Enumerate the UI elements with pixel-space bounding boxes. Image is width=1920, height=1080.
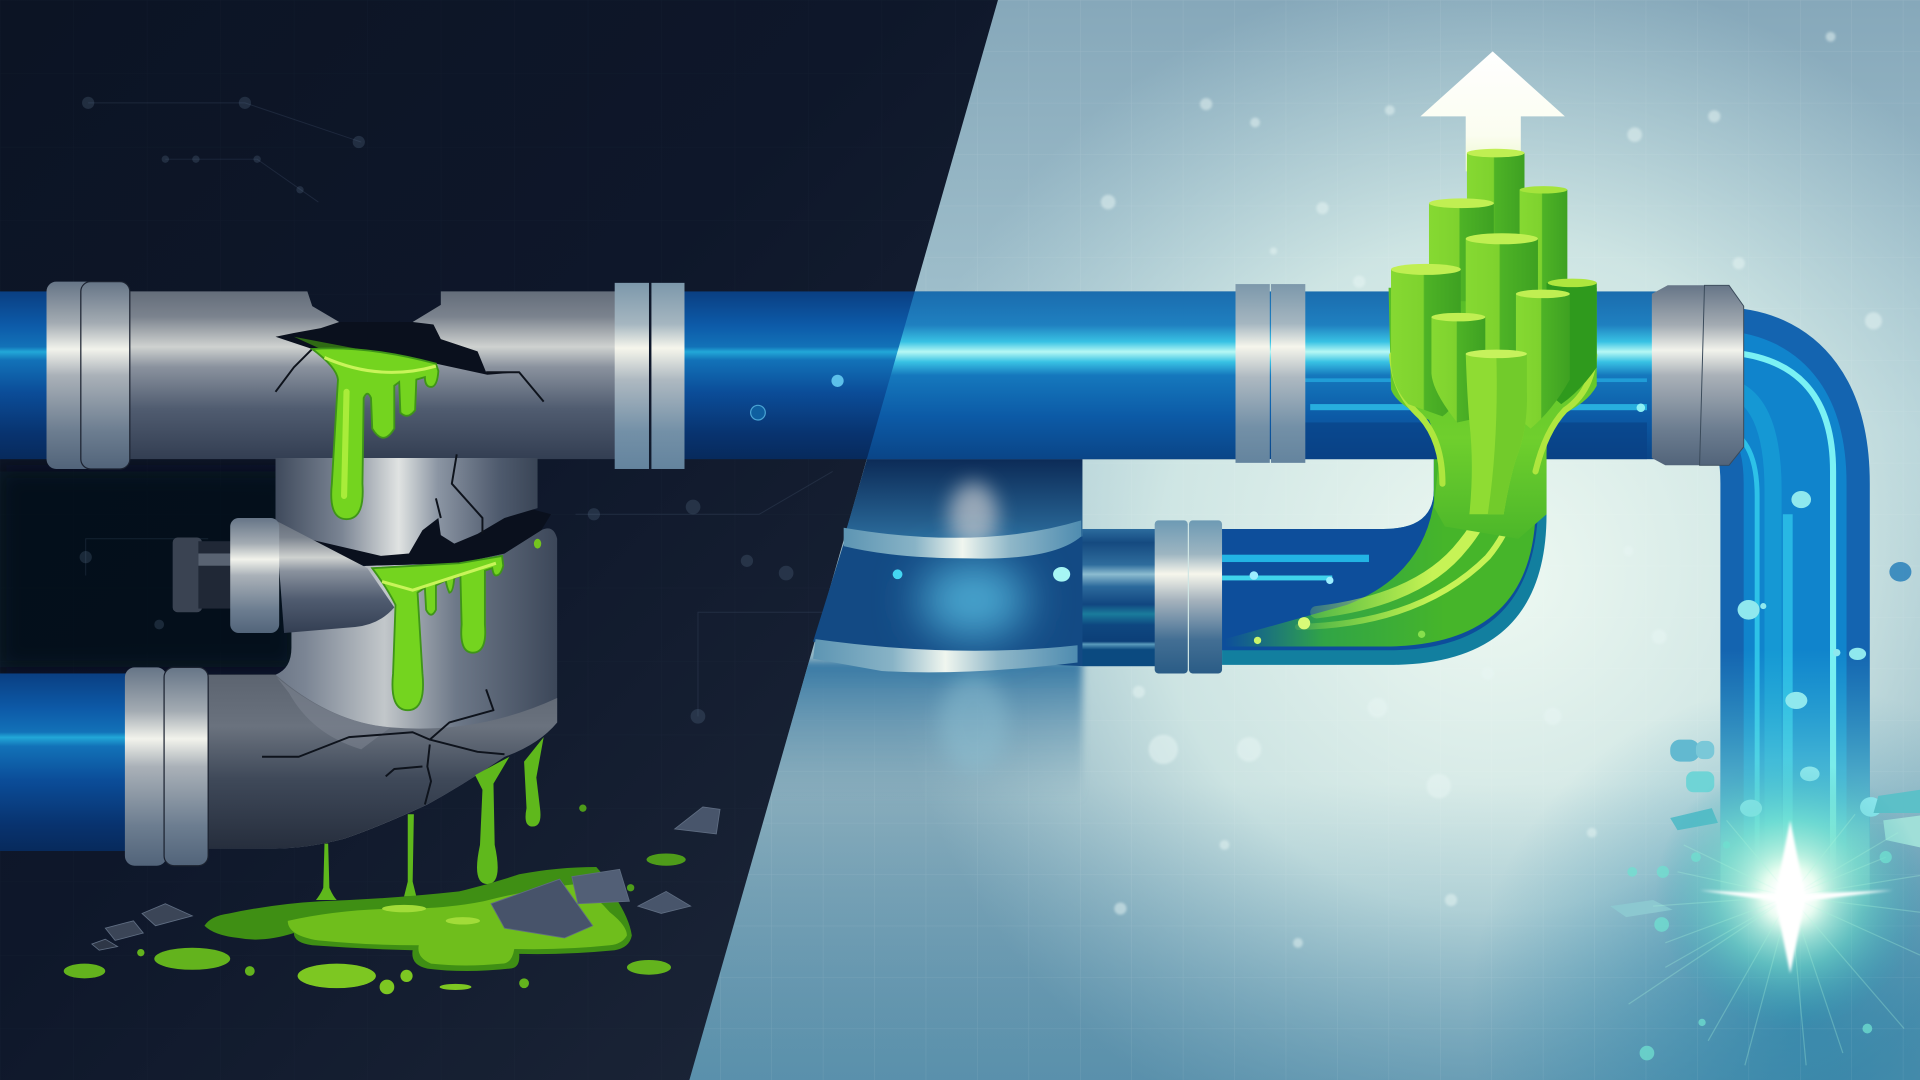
flanges on dark side: [47, 282, 684, 866]
cylinder: far left: [1391, 264, 1461, 416]
cylinder: right high: [1520, 186, 1567, 300]
rubble: [92, 807, 720, 950]
cylinder: top: [1467, 149, 1524, 263]
pipe: left stub: [173, 518, 394, 633]
slime: falling drips: [316, 737, 544, 900]
slime: middle leak: [372, 539, 541, 710]
flare highlight edges: [1392, 355, 1594, 484]
tank: upper body: [844, 459, 1082, 551]
water droplets in outlet: [1738, 491, 1882, 817]
green cylinder cluster: [1391, 149, 1597, 514]
pipe: grey upper section with notch: [122, 291, 618, 459]
tank: upper ring: [844, 520, 1081, 559]
elbow dark shell: [197, 675, 557, 849]
pipe: lower left blue: [0, 673, 135, 851]
pipe: vertical outlet elbow: [1720, 353, 1870, 931]
break: middle hole: [307, 502, 551, 566]
pipe: cracked grey lower body: [197, 528, 557, 849]
glow dots on main pipe: [751, 375, 1645, 420]
pipe: grey T junction: [276, 458, 538, 556]
sparks in green flow: [1250, 571, 1425, 644]
cylinder: centre: [1466, 233, 1538, 392]
rubble beside outlet: [1610, 740, 1920, 917]
tank: blue band: [813, 529, 1157, 666]
cylinder: left lower: [1431, 313, 1485, 422]
pipe: lower right connector: [1082, 529, 1158, 666]
panel: dark left background: [0, 0, 998, 1080]
cylinder: left high: [1429, 198, 1494, 301]
cracks: [262, 349, 544, 804]
green slime flare over pipe: [1389, 288, 1597, 539]
cylinder: front: [1466, 350, 1527, 514]
slime interior shadow: [294, 337, 436, 364]
pipe: top blue main (dark side): [0, 291, 1249, 459]
slime: upper leak: [312, 348, 438, 519]
arrow: white upward growth: [1420, 51, 1565, 171]
pipe: top blue main (bright side): [857, 291, 1714, 459]
flanges on bright side: [1155, 284, 1744, 673]
tank: lower fading body: [778, 656, 1088, 784]
light burst: [1629, 759, 1920, 1065]
slime puddle: [64, 804, 686, 994]
break: upper hole: [276, 322, 519, 375]
bright floating particles near burst: [1627, 841, 1892, 1060]
pipe: lower elbow with green flow: [1222, 453, 1547, 665]
tank: lower ring: [813, 639, 1078, 672]
cylinder: right lower: [1516, 290, 1570, 429]
cylinder: far right: [1547, 279, 1597, 404]
